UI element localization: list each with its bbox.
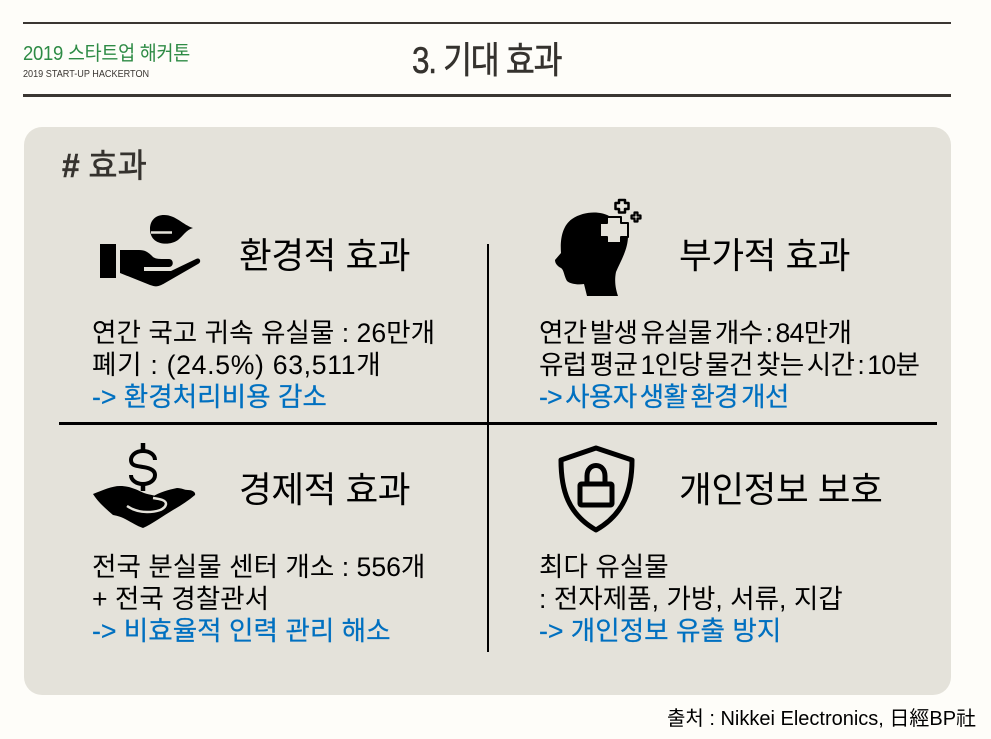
panel heading: # 효과 bbox=[62, 147, 147, 184]
text: economic effect: -> 비효율적 인력 관리 해소 bbox=[92, 616, 391, 646]
source note: 출처 : Nikkei Electronics, 日經BP社 bbox=[667, 708, 976, 730]
text: additional effect: 유럽 평균 1인당 물건 찾는 시간 : 10분 bbox=[539, 350, 919, 380]
header English subtitle: 2019 START-UP HACKERTON bbox=[23, 69, 149, 80]
heading: additional effect: 부가적 효과 bbox=[679, 236, 850, 276]
main panel bbox=[24, 127, 951, 695]
text: environmental effect bbox=[92, 318, 435, 412]
text: environmental effect: 폐기 : (24.5%) 63,511개 bbox=[92, 350, 381, 380]
text: personal information protection: 최다 유실물 bbox=[539, 552, 669, 582]
top rule bbox=[23, 22, 951, 24]
text: economic effect: + 전국 경찰관서 bbox=[92, 584, 269, 614]
header rule bbox=[23, 94, 951, 97]
text: economic effect bbox=[92, 552, 425, 646]
heading: personal information protection: 개인정보 보호 bbox=[679, 470, 882, 510]
text: environmental effect: -> 환경처리비용 감소 bbox=[92, 382, 327, 412]
heading: environmental effect: 환경적 효과 bbox=[239, 236, 410, 276]
heading: economic effect: 경제적 효과 bbox=[239, 470, 410, 510]
page title: 3. 기대 효과 bbox=[412, 40, 561, 81]
header subtitle: hackathon name: 2019 스타트업 해커톤 bbox=[23, 43, 190, 65]
text: additional effect: -> 사용자 생활 환경 개선 bbox=[539, 382, 789, 412]
text: environmental effect: 연간 국고 귀속 유실물 : 26만개 bbox=[92, 318, 435, 348]
text: personal information protection bbox=[539, 552, 843, 646]
text: economic effect: 전국 분실물 센터 개소 : 556개 bbox=[92, 552, 425, 582]
horizontal divider bbox=[59, 422, 937, 425]
vertical divider bbox=[487, 244, 489, 652]
text: personal information protection: : 전자제품, 가방, 서류, 지갑 bbox=[539, 584, 843, 614]
text: additional effect: 연간 발생 유실물 개수 : 84만개 bbox=[539, 318, 851, 348]
text: additional effect bbox=[539, 318, 919, 412]
text: personal information protection: -> 개인정보 유출 방지 bbox=[539, 616, 781, 646]
